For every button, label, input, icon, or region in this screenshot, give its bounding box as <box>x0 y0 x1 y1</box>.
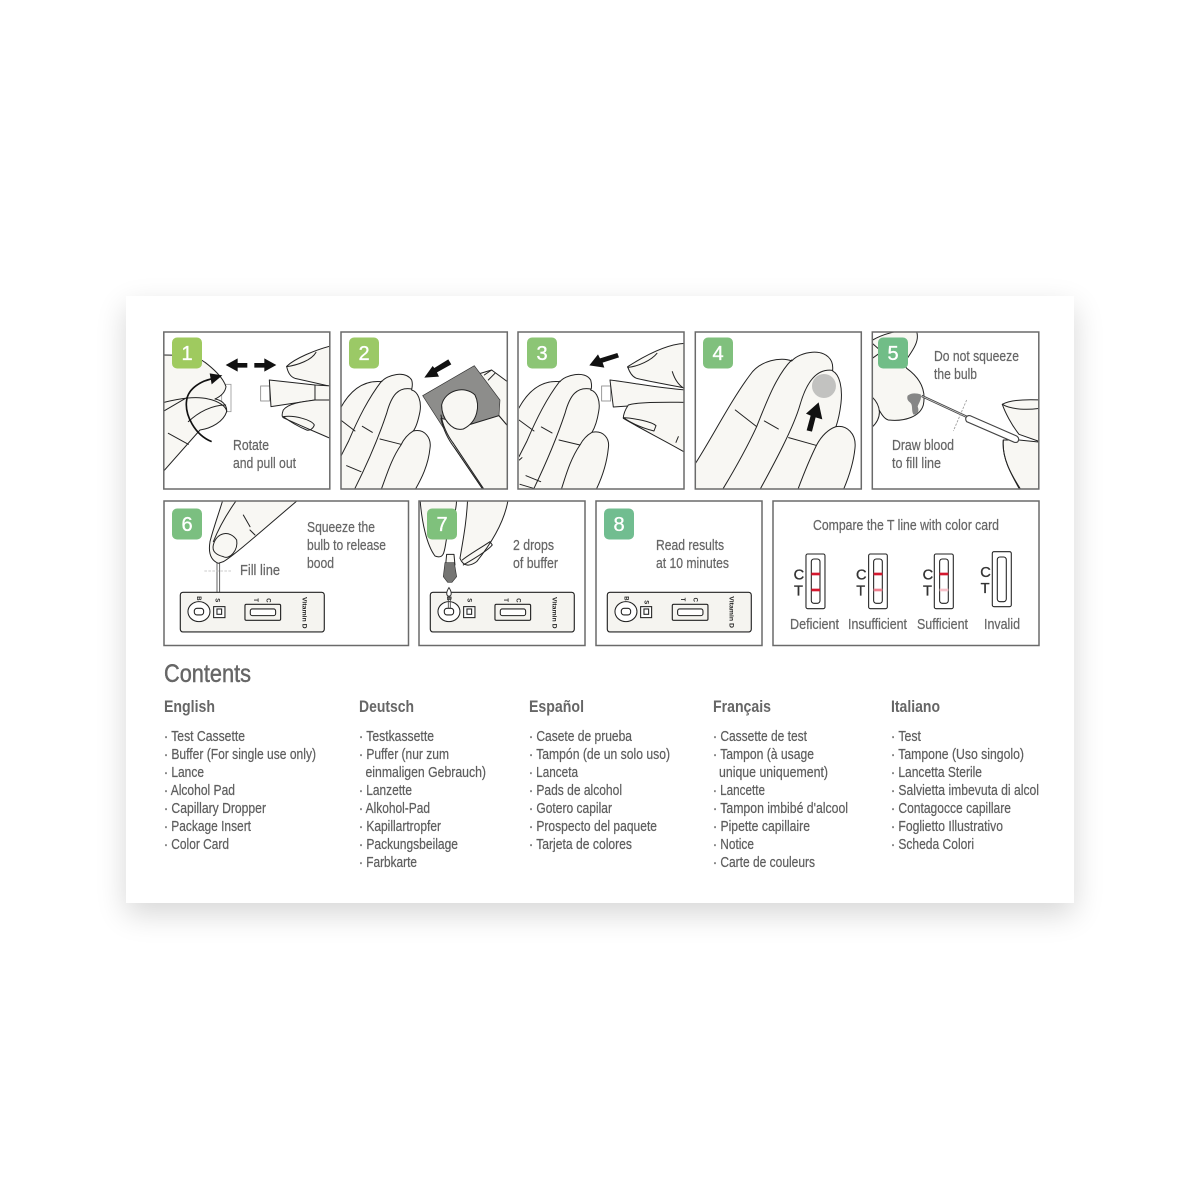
caption: do not squeeze: Do not squeeze <box>934 349 1019 365</box>
contents column: Italiano: · Contagocce capillare <box>891 801 1011 817</box>
panel: colour card comparison <box>773 501 1039 646</box>
caption: 2 drops of buffer <box>513 538 558 572</box>
cassette: Vitamin D <box>550 597 556 629</box>
contents column: Français: · Tampon (à usage <box>713 747 814 763</box>
frame <box>872 332 1039 489</box>
contents column: English: · Color Card <box>164 837 229 853</box>
cassette: S <box>213 598 219 602</box>
illustration: rotating the lancet cap <box>162 346 332 473</box>
contents column: Deutsch: · Testkassette <box>359 729 434 745</box>
contents column: Français: · Cassette de test <box>713 729 807 745</box>
frame <box>596 501 762 646</box>
panel: step 4 <box>693 332 861 490</box>
badge 2: 2 <box>358 343 370 365</box>
cassette: C <box>691 598 697 603</box>
contents column: Español: · Prospecto del paquete <box>529 819 657 835</box>
contents column: Français: · Lancette <box>713 783 765 799</box>
cassette: invalid: C <box>980 565 991 581</box>
panel: step 7 <box>419 498 585 646</box>
cassette <box>180 592 324 632</box>
contents column: Deutsch: · Packungsbeilage <box>359 837 458 853</box>
contents column: Français: · Notice <box>713 837 754 853</box>
cassette: Vitamin D <box>300 597 306 629</box>
caption: rotate and pull out: and pull out <box>233 456 296 472</box>
result labels: Invalid <box>984 617 1020 633</box>
contents column: Español: Español <box>529 698 584 716</box>
contents column: English: · Alcohol Pad <box>164 783 235 799</box>
badge 8: 8 <box>613 514 625 536</box>
cassette: sufficient <box>923 554 953 609</box>
caption: read results: Read results <box>656 538 724 554</box>
caption: do not squeeze <box>934 349 1019 383</box>
cassette: Vitamin D <box>727 596 733 629</box>
illustration: opening the alcohol pad <box>338 359 508 490</box>
contents column: English: · Lance <box>164 765 204 781</box>
illustration: squeezing dropper over sample well <box>204 502 297 592</box>
cassette: B <box>445 596 451 601</box>
contents column: Italiano: · Scheda Colori <box>891 837 974 853</box>
cassette: sufficient: T <box>923 583 932 599</box>
caption: read results <box>656 538 729 572</box>
contents column: Français: · Carte de couleurs <box>713 855 815 871</box>
frame <box>419 501 585 646</box>
cassette: insufficient: C <box>856 567 867 583</box>
heading: contents: Contents <box>164 660 251 688</box>
contents column: Français: · Pipette capillaire <box>713 819 810 835</box>
result labels: Insufficient <box>848 617 907 633</box>
contents column: Deutsch: · Lanzette <box>359 783 412 799</box>
contents column: Français: unique uniquement) <box>719 765 828 781</box>
badge 3: 3 <box>536 343 548 365</box>
illustration: lancet moved towards finger <box>517 343 687 490</box>
badge 2 <box>349 338 379 368</box>
cassette: B <box>623 596 629 601</box>
cassette: B <box>195 596 201 601</box>
panel: step 2 <box>338 332 508 490</box>
result labels: Deficient <box>790 617 839 633</box>
badge 6 <box>172 508 202 540</box>
contents column: Español: · Lanceta <box>529 765 579 781</box>
caption: rotate and pull out <box>233 438 296 472</box>
frame <box>695 332 861 489</box>
cassette <box>430 592 574 632</box>
contents column: Deutsch: · Alkohol-Pad <box>359 801 430 817</box>
contents column: Français: Français <box>713 698 771 716</box>
contents column: Deutsch: · Farbkarte <box>359 855 417 871</box>
contents column: Deutsch: Deutsch <box>359 698 414 716</box>
caption: 2 drops of buffer: 2 drops <box>513 538 554 554</box>
cassette: T <box>252 598 258 602</box>
contents column: Deutsch: · Kapillartropfer <box>359 819 441 835</box>
cassette: invalid: T <box>981 581 990 597</box>
contents column: Español: · Casete de prueba <box>529 729 633 745</box>
panel: step 5 <box>870 330 1042 490</box>
badge 3 <box>527 338 557 368</box>
cassette: deficient <box>794 554 825 609</box>
cassette: S <box>466 598 472 602</box>
contents column: English <box>164 698 316 853</box>
caption: do not squeeze: the bulb <box>934 367 977 383</box>
caption: squeeze the bulb <box>307 520 386 572</box>
badge 1 <box>172 338 202 368</box>
cassette: deficient: T <box>794 583 803 599</box>
contents column: Deutsch: · Puffer (nur zum <box>359 747 449 763</box>
badge 5 <box>878 338 908 368</box>
contents column: Français <box>713 698 848 871</box>
cassette: C <box>514 598 520 603</box>
contents column: Español: · Tampón (de un solo uso) <box>529 747 670 763</box>
frame <box>773 501 1039 646</box>
contents column: Español <box>529 698 670 853</box>
contents column: Español: · Gotero capilar <box>529 801 612 817</box>
frame <box>518 332 684 489</box>
cassette: invalid <box>980 552 1011 607</box>
badge 4: 4 <box>712 343 724 365</box>
contents column: English: · Test Cassette <box>164 729 245 745</box>
contents column: Italiano: Italiano <box>891 698 940 716</box>
panel: step 8 <box>596 501 762 646</box>
contents column: English: · Capillary Dropper <box>164 801 266 817</box>
contents column: Italiano: · Test <box>891 729 921 745</box>
illustration: fingers squeezing buffer bottle <box>420 498 508 608</box>
contents column: Italiano: · Foglietto Illustrativo <box>891 819 1003 835</box>
contents column: Italiano: · Tampone (Uso singolo) <box>891 747 1024 763</box>
frame <box>164 332 330 489</box>
badge 6: 6 <box>181 514 193 536</box>
heading: compare: Compare the T line with color card <box>813 518 999 534</box>
badge 1: 1 <box>181 343 193 365</box>
panel: step 1 <box>162 332 332 489</box>
panel: step 3 <box>517 332 687 490</box>
contents column: Español: · Tarjeta de colores <box>529 837 632 853</box>
result cassettes <box>794 552 1011 609</box>
contents column: Italiano: · Lancetta Sterile <box>891 765 982 781</box>
caption: draw blood: to fill line <box>892 456 941 472</box>
cassette: deficient: C <box>794 567 805 583</box>
cassette: T <box>679 598 685 602</box>
result labels <box>790 617 1020 633</box>
caption: squeeze the bulb: Squeeze the <box>307 520 375 536</box>
caption: rotate and pull out: Rotate <box>233 438 269 454</box>
contents column: English: · Package Insert <box>164 819 251 835</box>
contents column: Deutsch: einmaligen Gebrauch) <box>366 765 486 781</box>
badge 7 <box>427 508 457 540</box>
caption: 2 drops of buffer: of buffer <box>513 556 558 572</box>
badge 5: 5 <box>887 343 899 365</box>
contents column: Español: · Pads de alcohol <box>529 783 622 799</box>
caption: read results: at 10 minutes <box>656 556 729 572</box>
badge 4 <box>703 338 733 368</box>
cassette: T <box>502 598 508 602</box>
contents column: Deutsch <box>359 698 486 871</box>
cassette: C <box>264 598 270 603</box>
cassette <box>607 592 751 632</box>
contents column: Italiano <box>891 698 1039 853</box>
cassette: insufficient <box>856 554 887 609</box>
illustration: blood drop on fingertip <box>693 352 855 490</box>
result labels: Sufficient <box>917 617 968 633</box>
illustration: drawing blood with capillary dropper <box>870 330 1042 490</box>
caption: draw blood <box>892 438 954 472</box>
badge 8 <box>604 508 634 540</box>
contents column: English: · Buffer (For single use only) <box>164 747 316 763</box>
cassette: S <box>642 600 648 604</box>
contents column: Italiano: · Salvietta imbevuta di alcol <box>891 783 1039 799</box>
instruction card <box>126 296 1074 903</box>
cassette: insufficient: T <box>856 583 865 599</box>
caption: draw blood: Draw blood <box>892 438 954 454</box>
contents column: English: English <box>164 698 215 716</box>
contents column: Français: · Tampon imbibé d'alcool <box>713 801 848 817</box>
caption: squeeze the bulb: bulb to release <box>307 538 386 554</box>
badge 7: 7 <box>436 514 448 536</box>
cassette: sufficient: C <box>923 567 934 583</box>
panel: step 6 <box>164 498 408 646</box>
frame <box>164 501 408 646</box>
frame <box>341 332 507 489</box>
caption: squeeze the bulb: bood <box>307 556 334 572</box>
label: fill line: Fill line <box>240 563 280 579</box>
